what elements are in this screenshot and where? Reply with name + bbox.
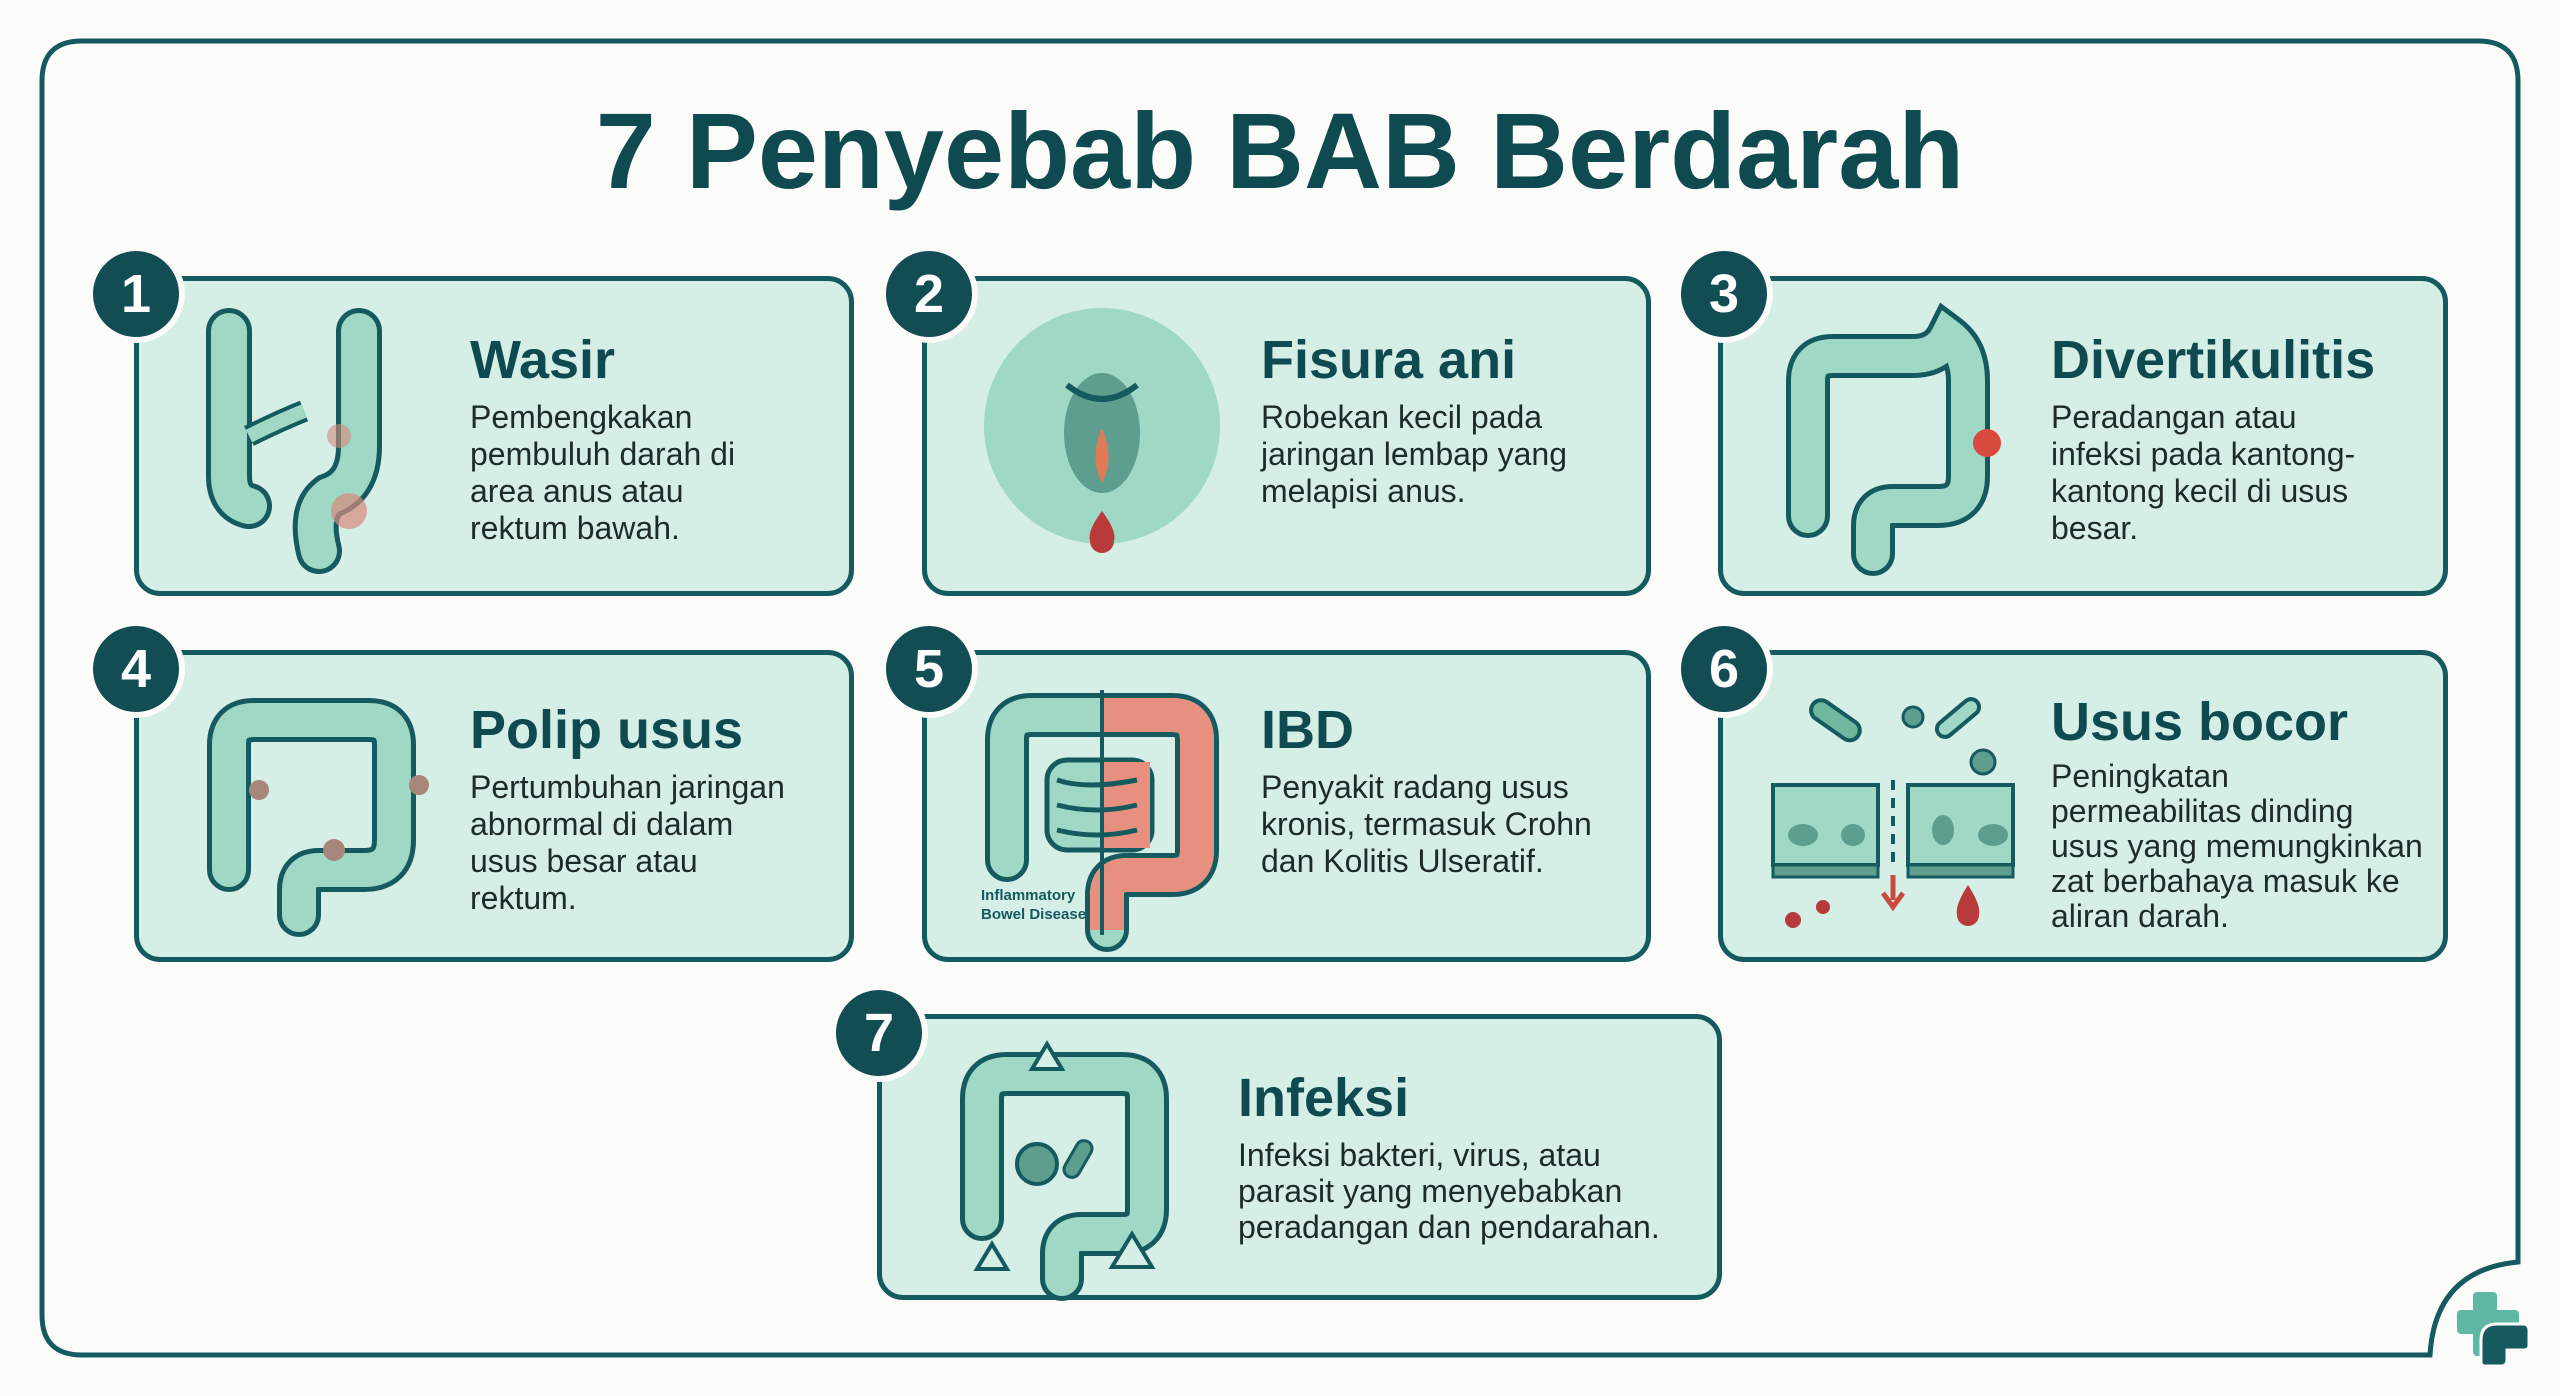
panel: 4 Polip usus	[134, 650, 854, 962]
badge 4: 4	[121, 639, 151, 699]
text: abnormal di dalam	[470, 806, 733, 842]
text	[2051, 399, 2355, 546]
text: rektum.	[470, 880, 577, 916]
panel: 3 Divertikulitis	[1718, 276, 2448, 596]
icon: IBD	[981, 690, 1219, 952]
text: infeksi pada kantong-	[2051, 436, 2355, 472]
badge 7	[830, 984, 928, 1082]
text: zat berbahaya masuk ke	[2051, 863, 2400, 899]
icon: leaky gut	[1771, 697, 2015, 928]
text: Robekan kecil pada	[1261, 399, 1542, 435]
title: 7 Penyebab BAB Berdarah	[596, 90, 1964, 211]
text	[470, 769, 785, 916]
badge 5	[880, 620, 978, 718]
text: pembuluh darah di	[470, 436, 735, 472]
text: permeabilitas dinding	[2051, 793, 2353, 829]
icon: IBD: Inflammatory	[981, 887, 1076, 904]
title: Infeksi	[1238, 1068, 1409, 1128]
text: kronis, termasuk Crohn	[1261, 806, 1592, 842]
panel: 6 Usus bocor	[1718, 650, 2448, 962]
text: dan Kolitis Ulseratif.	[1261, 843, 1544, 879]
title: Divertikulitis	[2051, 330, 2375, 390]
text: Penyakit radang usus	[1261, 769, 1569, 805]
badge 1: 1	[121, 264, 151, 324]
text: aliran darah.	[2051, 898, 2229, 934]
text: parasit yang menyebabkan	[1238, 1173, 1622, 1209]
badge 7: 7	[864, 1003, 894, 1063]
icon: polyp colon	[207, 698, 429, 937]
title: Wasir	[470, 330, 615, 390]
panel: 2 Fisura ani	[922, 276, 1651, 596]
text: rektum bawah.	[470, 510, 680, 546]
badge 6	[1675, 620, 1773, 718]
badge 6: 6	[1709, 639, 1739, 699]
badge 3	[1675, 245, 1773, 343]
text: Peningkatan	[2051, 758, 2229, 794]
title: Usus bocor	[2051, 692, 2348, 752]
text: jaringan lembap yang	[1261, 436, 1567, 472]
badge 1	[87, 245, 185, 343]
icon: IBD: Bowel Disease	[981, 906, 1086, 923]
text: Pertumbuhan jaringan	[470, 769, 785, 805]
badge 2: 2	[914, 264, 944, 324]
icon: infection	[960, 1040, 1169, 1301]
text: Peradangan atau	[2051, 399, 2297, 435]
text: peradangan dan pendarahan.	[1238, 1209, 1660, 1245]
text: melapisi anus.	[1261, 473, 1466, 509]
panel: 5 IBD	[922, 650, 1651, 962]
text: besar.	[2051, 510, 2138, 546]
panel: 7 Infeksi	[877, 1014, 1722, 1300]
icon: wasir	[206, 308, 382, 574]
text	[2051, 758, 2423, 934]
text: usus yang memungkinkan	[2051, 828, 2423, 864]
badge 3: 3	[1709, 264, 1739, 324]
badge 5: 5	[914, 639, 944, 699]
text: area anus atau	[470, 473, 684, 509]
logo	[2457, 1292, 2528, 1364]
badge 4	[87, 620, 185, 718]
text	[470, 399, 735, 546]
text	[1260, 399, 1567, 509]
text: Infeksi bakteri, virus, atau	[1238, 1137, 1601, 1173]
text	[1238, 1137, 1660, 1245]
text: kantong kecil di usus	[2051, 473, 2348, 509]
badge 2	[880, 245, 978, 343]
icon: fisura	[984, 308, 1220, 553]
text	[1261, 769, 1592, 879]
text: usus besar atau	[470, 843, 698, 879]
title: IBD	[1261, 700, 1354, 760]
text: Pembengkakan	[470, 399, 692, 435]
title: Polip usus	[470, 700, 743, 760]
title: Fisura ani	[1261, 330, 1516, 390]
icon: colon	[1786, 302, 2001, 576]
panel: 1 Wasir	[134, 276, 854, 596]
